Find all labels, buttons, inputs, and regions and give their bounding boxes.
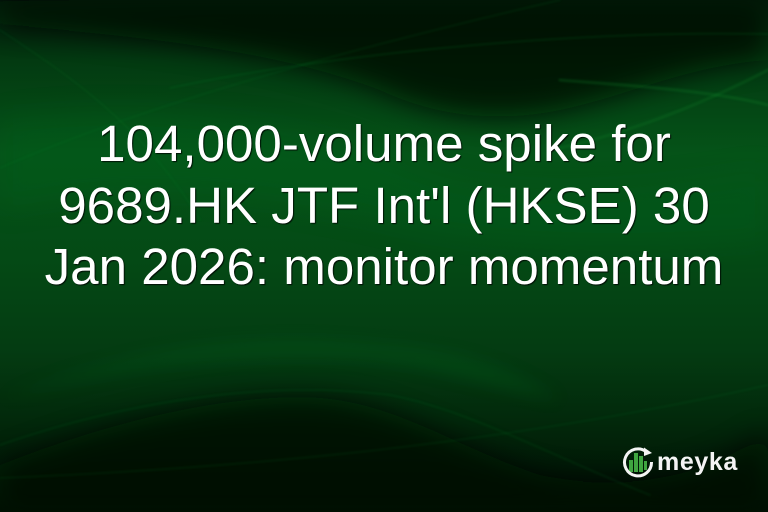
title: 104,000-volume spike for (97, 115, 671, 172)
logo: meyka (622, 447, 738, 478)
wordmark: meyka (657, 448, 738, 476)
title (45, 115, 723, 295)
icon: circular arrow with green bars (625, 448, 652, 476)
title: 9689.HK JTF Int'l (HKSE) 30 (58, 176, 710, 234)
title: Jan 2026: monitor momentum (45, 238, 723, 295)
